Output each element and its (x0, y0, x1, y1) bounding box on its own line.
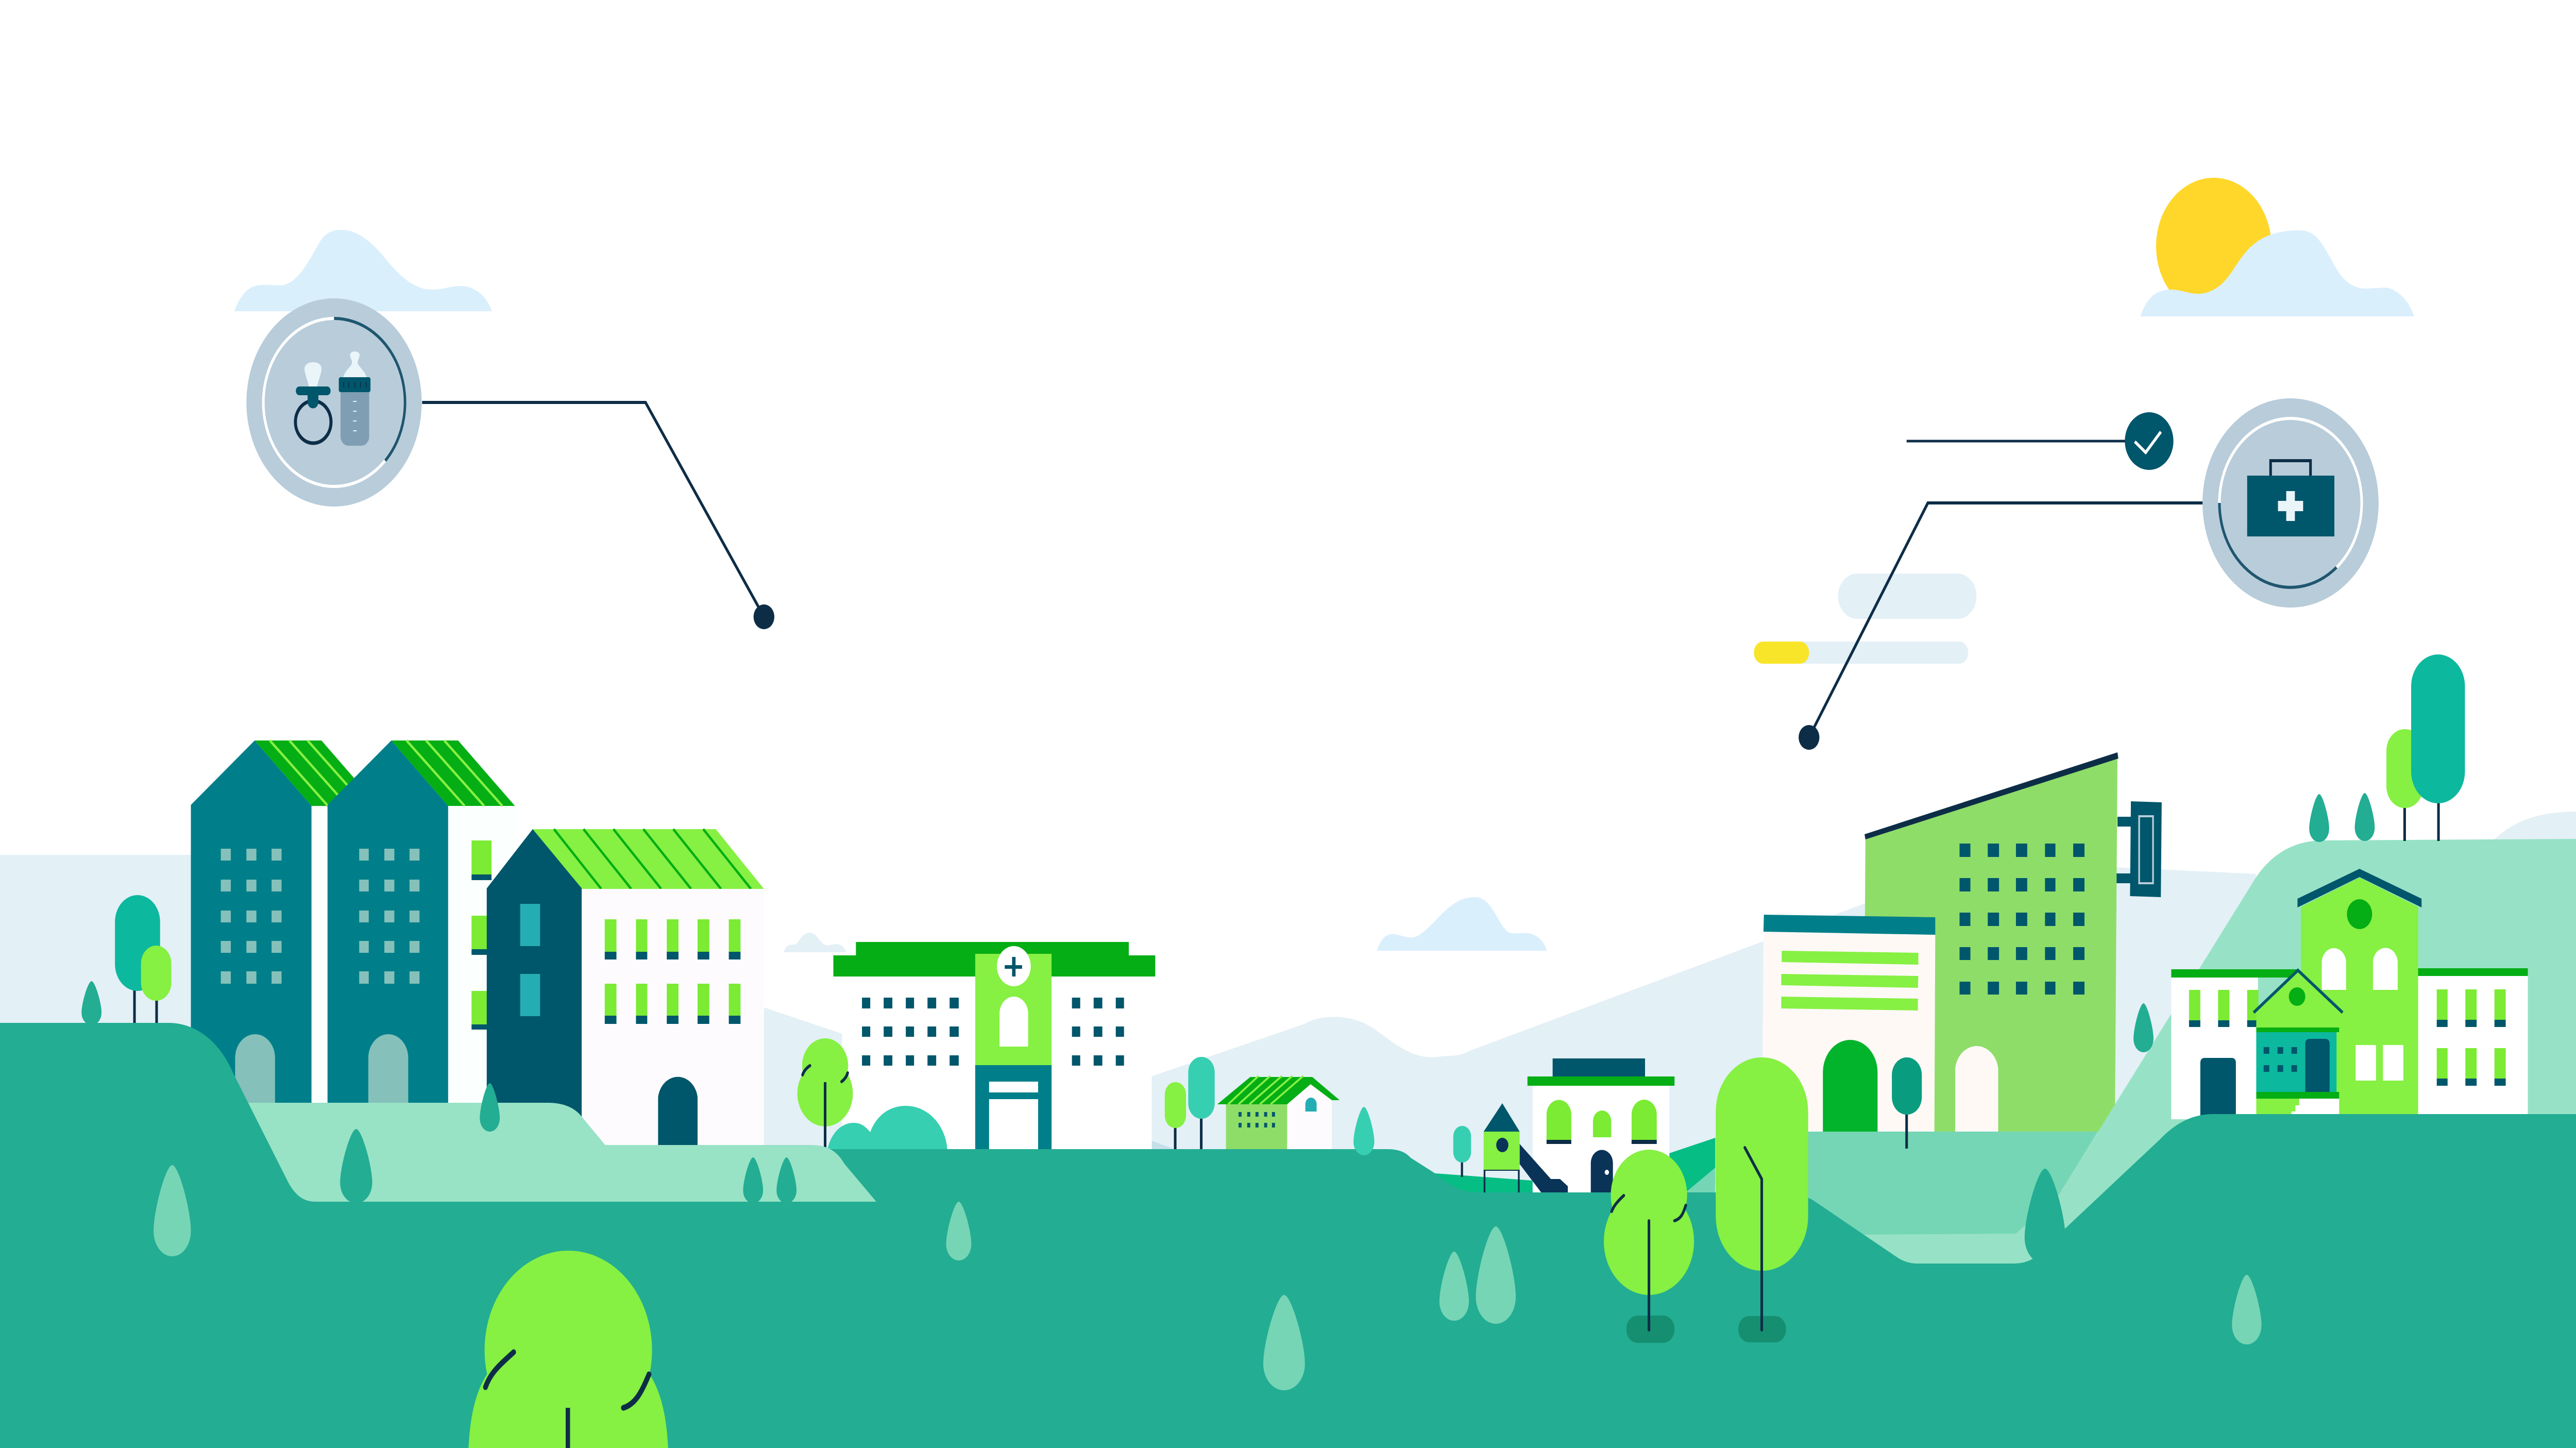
building: white block with windows (582, 889, 764, 1149)
callout line: right (1809, 503, 2204, 737)
hill: mint mound left (217, 1103, 877, 1203)
tree: teal left (115, 895, 160, 1025)
sun (2156, 178, 2272, 315)
hospital (834, 942, 1155, 1152)
tree: lime by hospital (798, 1038, 853, 1152)
tree: teal pill right ridge (2411, 654, 2465, 841)
building: teal tower one (191, 740, 312, 1118)
hill: mint right (1857, 839, 2576, 1278)
icon: check badge (2125, 412, 2174, 470)
drop tree: on mound large (340, 1129, 372, 1203)
right complex: portico (2253, 970, 2343, 1118)
tree: lime round with pot (1604, 1150, 1694, 1343)
drop tree: right ridge two (2355, 793, 2375, 841)
background: pale far right hill (2493, 812, 2576, 845)
tree: lime left (141, 946, 172, 1025)
cloud: small by hospital (784, 933, 846, 952)
building: dark gable block (487, 829, 582, 1149)
field: bright green right of school (1669, 1138, 1715, 1192)
icon: medical kit badge (2202, 398, 2379, 608)
drop tree: right ridge one (2309, 794, 2329, 842)
background: pale left field (0, 855, 199, 1030)
roof: green first tower (255, 740, 378, 806)
tree: lime pill right ridge (2386, 729, 2424, 841)
drop tree: mint on left hill (154, 1165, 191, 1256)
callout dot: right (1799, 725, 1819, 750)
background: darker foot of mountain (1148, 1139, 1177, 1150)
drop tree: mint right (2232, 1275, 2262, 1344)
cloud: middle (1377, 897, 1547, 951)
building: white front block (1762, 915, 1935, 1132)
field: pale strip right of school (1686, 1168, 1715, 1196)
right complex: right wing (2418, 968, 2528, 1116)
roof: green second tower (392, 740, 515, 806)
bushes by hospital (827, 1106, 947, 1152)
drop tree: far left (81, 981, 101, 1025)
playhouse with slide (1484, 1103, 1568, 1196)
icon: baby items badge (246, 298, 421, 507)
hanging sign (2116, 801, 2162, 897)
right complex: left wing (2171, 969, 2298, 1119)
tree: lime pill by cottage (1165, 1082, 1186, 1152)
callout dot: left (754, 604, 774, 629)
icon: baby bottle (339, 351, 370, 446)
cottage (1217, 1076, 1340, 1152)
progress bar (1754, 642, 1968, 664)
drop tree: by right complex (2133, 1003, 2154, 1052)
tree: small green by white block (1892, 1057, 1922, 1149)
drop tree: on mound right one (743, 1157, 763, 1203)
drop tree: mint lower centre (1263, 1295, 1305, 1390)
tower: green office building (1863, 752, 2119, 1132)
callout line: check (1907, 440, 2126, 442)
drop tree: aqua by cottage (1353, 1107, 1375, 1155)
cloud: top left (234, 230, 492, 311)
building: white rear block (312, 806, 516, 1115)
tree: aqua pill by cottage (1188, 1057, 1215, 1152)
ground: main right (827, 1114, 2576, 1448)
background: pale wedge behind left buildings (764, 1007, 842, 1154)
right complex: central tower (2297, 869, 2421, 1118)
building: teal tower two (328, 740, 448, 1118)
drop tree: mint pair right (1476, 1226, 1516, 1324)
callout line: left (422, 402, 764, 617)
ground: left hill (0, 1023, 911, 1448)
pale pill (1838, 574, 1976, 619)
drop tree: mint pair left (1439, 1252, 1469, 1321)
drop tree: dark at valley (2025, 1169, 2065, 1264)
school (1528, 1058, 1674, 1196)
roof: lime third building (533, 829, 764, 889)
tree: big lime foreground (468, 1251, 668, 1448)
cloud: top right (2141, 230, 2414, 316)
field: bright green by playhouse (1432, 1173, 1533, 1206)
drop tree: on mound right two (776, 1157, 796, 1203)
drop tree: on mound small (480, 1083, 500, 1132)
tree: aqua by playhouse (1453, 1126, 1471, 1177)
tree: lime pill with pot (1716, 1057, 1808, 1342)
icon: pacifier (295, 362, 331, 443)
background: pale mountains (1148, 867, 2256, 1185)
drop tree: mint centre (946, 1202, 971, 1260)
field: mid green (1807, 1132, 2098, 1235)
